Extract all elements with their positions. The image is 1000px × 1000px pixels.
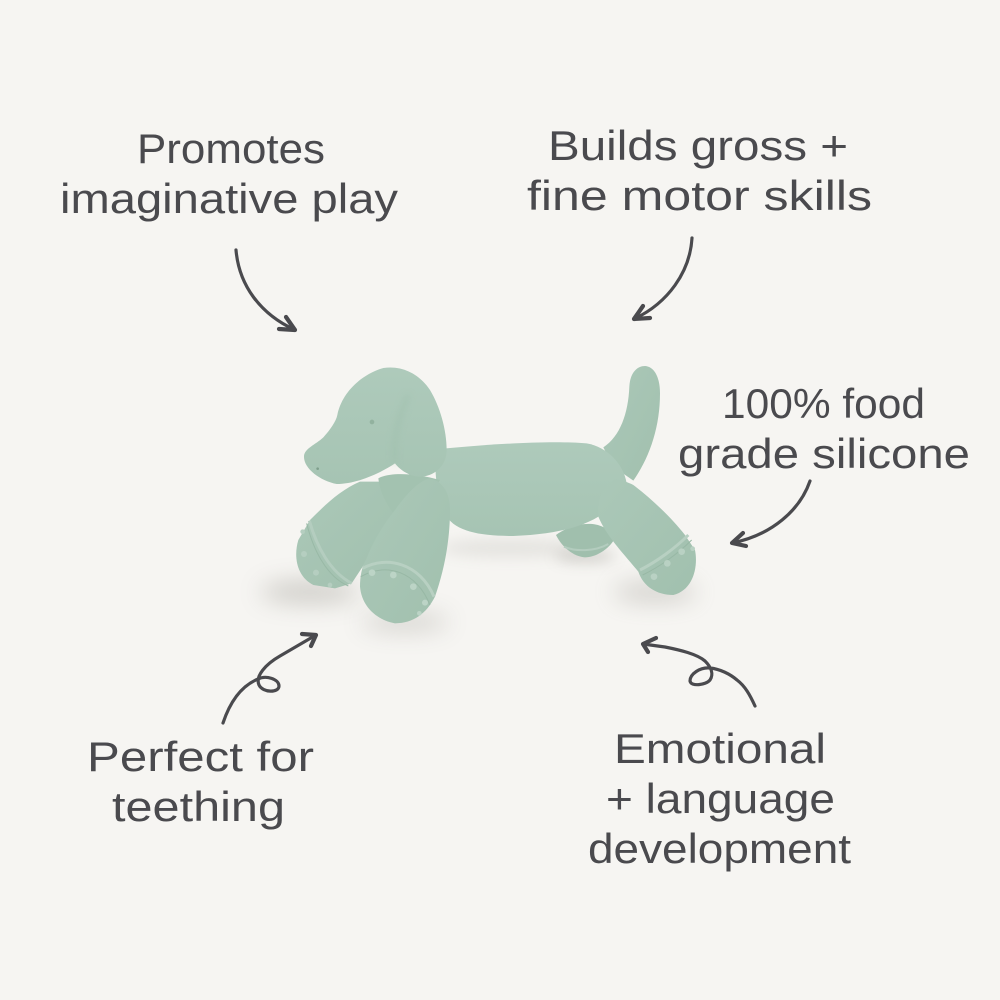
text: builds gross and fine motor skills xyxy=(527,122,872,219)
arrow: promotes play to dog xyxy=(236,250,295,330)
ear shading xyxy=(394,395,408,463)
text: promotes imaginative play: imaginative play xyxy=(60,175,398,222)
eye and nostril xyxy=(370,420,374,424)
text: perfect for teething: Perfect for xyxy=(87,733,314,780)
text: perfect for teething: teething xyxy=(112,783,285,830)
near hind leg xyxy=(598,480,696,595)
arrow: silicone to dog xyxy=(732,481,810,546)
text: emotional and language development: + language xyxy=(606,775,835,822)
text: emotional and language development: development xyxy=(588,825,851,872)
arrow: language to dog with loop xyxy=(643,638,755,706)
tail xyxy=(603,366,660,481)
text: 100% food grade silicone: 100% food xyxy=(722,380,925,427)
chest xyxy=(378,474,440,513)
near front leg xyxy=(360,478,450,623)
body xyxy=(435,442,627,536)
text: emotional and language development: Emotional xyxy=(614,725,826,772)
arrow: motor skills to dog xyxy=(634,238,692,319)
dog teether toy xyxy=(260,366,697,631)
text: 100% food grade silicone xyxy=(678,380,970,477)
ground shadow xyxy=(260,538,697,631)
text: builds gross and fine motor skills: fine motor skills xyxy=(527,172,872,219)
head xyxy=(304,367,447,484)
text: emotional and language development xyxy=(588,725,851,872)
arrow: teething to dog with loop xyxy=(223,634,316,723)
far hind leg xyxy=(556,524,615,557)
text: promotes imaginative play: Promotes xyxy=(137,125,325,172)
text: builds gross and fine motor skills: Builds gross + xyxy=(548,122,848,169)
text: promotes imaginative play xyxy=(60,125,398,222)
far front leg xyxy=(296,482,400,588)
text: 100% food grade silicone: grade silicone xyxy=(678,430,970,477)
text: perfect for teething xyxy=(87,733,314,830)
